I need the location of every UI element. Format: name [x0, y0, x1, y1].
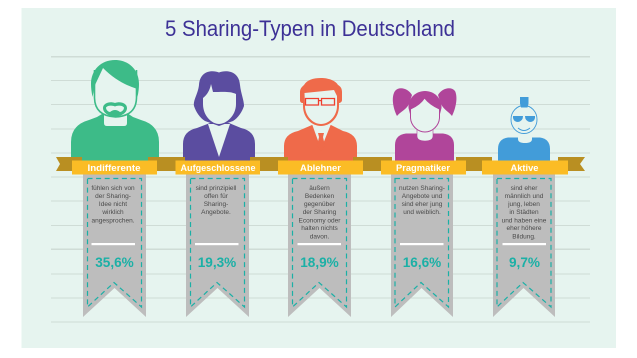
banner: Ablehner	[288, 174, 351, 317]
description: sind eher jung	[402, 201, 443, 208]
description: halten nichts	[301, 225, 338, 232]
description: und haben eine	[502, 218, 547, 224]
banner: Aktive	[493, 174, 555, 317]
percentage: 18,9%	[300, 255, 339, 270]
description: davon.	[310, 234, 329, 240]
icon: woman with bob (Aufgeschlossene)	[183, 71, 255, 161]
description: äußern	[309, 185, 330, 192]
description: Sharing-	[204, 201, 228, 208]
description: gegenüber	[304, 201, 336, 208]
label: Pragmatiker: Pragmatiker	[396, 163, 450, 174]
label: Ablehner	[278, 160, 363, 174]
description: Economy oder	[299, 218, 341, 224]
description: angesprochen.	[91, 218, 135, 224]
description: Bedenken	[305, 193, 335, 200]
percentage: 9,7%	[509, 255, 540, 270]
description: der Sharing	[303, 209, 337, 216]
description: nutzen Sharing-	[399, 185, 445, 192]
description: und weiblich.	[403, 209, 441, 216]
label: Indifferente: Indifferente	[88, 163, 140, 174]
label: Aufgeschlossene: Aufgeschlossene	[180, 163, 256, 174]
description: offen für	[204, 193, 229, 200]
description: Bildung.	[512, 234, 536, 240]
description: Idee nicht	[99, 201, 127, 208]
icon: man with glasses and tie (Ablehner)	[284, 78, 357, 161]
label: Ablehner: Ablehner	[300, 163, 341, 174]
icon: punk with sunglasses (Aktive)	[498, 97, 550, 161]
label: Aktive	[482, 160, 568, 174]
percentage: 16,6%	[403, 255, 441, 270]
description: sind prinzipiell	[196, 185, 237, 192]
description: in Städten	[509, 209, 539, 216]
description: männlich und	[505, 193, 544, 200]
description: wirklich	[101, 209, 124, 216]
label: Pragmatiker	[381, 160, 466, 174]
banner: Aufgeschlossene	[186, 174, 249, 317]
title: 5 Sharing-Typen in Deutschland	[165, 16, 455, 41]
banner: Indifferente	[83, 174, 146, 317]
description: Angebote und	[402, 193, 443, 200]
description: sind eher	[511, 185, 538, 192]
description: eher höhere	[506, 225, 542, 232]
description: fühlen sich von	[91, 185, 135, 192]
label: Aktive: Aktive	[510, 163, 538, 174]
description: Angebote.	[201, 209, 231, 216]
description: jung, leben	[507, 201, 540, 208]
label: Indifferente	[72, 160, 157, 174]
icon: bearded man (Indifferente)	[71, 60, 159, 161]
percentage: 19,3%	[198, 255, 236, 270]
percentage: 35,6%	[95, 255, 134, 270]
description: der Sharing-	[95, 193, 131, 200]
banner: Pragmatiker	[391, 174, 453, 317]
icon: girl with pigtails (Pragmatiker)	[393, 88, 456, 161]
ribbon: gold band segments	[56, 157, 585, 171]
